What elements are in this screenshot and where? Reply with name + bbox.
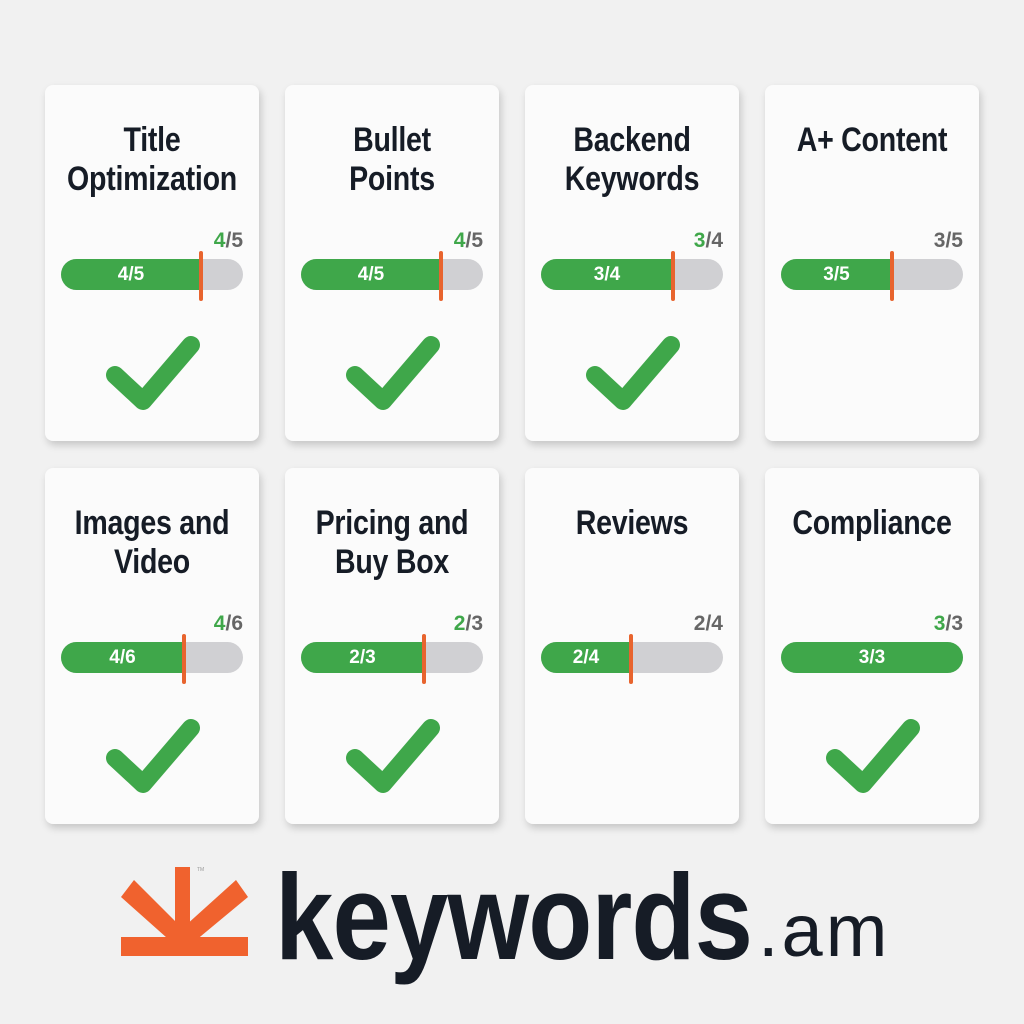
- marker: [439, 251, 443, 301]
- card: Bullet Points: [285, 85, 499, 441]
- score label: 3/3: [934, 612, 963, 635]
- title: A+ Content: [797, 121, 947, 159]
- progress bar: 3/5: [823, 264, 850, 285]
- progress bar: [61, 642, 243, 673]
- title: Compliance: [792, 504, 952, 542]
- card: Images and Video: [45, 468, 259, 824]
- title: [316, 504, 468, 581]
- score label: 4/5: [214, 229, 243, 252]
- title: Backend: [573, 121, 691, 159]
- title: Bullet: [353, 121, 431, 159]
- icon: check: [106, 336, 200, 410]
- score label: 2/4: [694, 612, 723, 635]
- icon: check: [346, 336, 440, 410]
- icon: check: [346, 719, 440, 793]
- progress bar: [301, 259, 483, 290]
- progress bar: 4/5: [118, 264, 144, 285]
- progress bar: [541, 259, 723, 290]
- score label: 4/5: [454, 229, 483, 252]
- title: [67, 121, 237, 198]
- card: Title Optimization: [45, 85, 259, 441]
- logo: [121, 849, 890, 985]
- icon: logo mark: TM: [197, 867, 204, 873]
- card: Pricing and Buy Box: [285, 468, 499, 824]
- marker: [199, 251, 203, 301]
- icon: check: [586, 336, 680, 410]
- progress bar: 2/4: [573, 647, 599, 668]
- title: Optimization: [67, 160, 237, 198]
- progress bar: [781, 259, 963, 290]
- title: Keywords: [565, 160, 699, 198]
- title: [75, 504, 229, 581]
- card: A+ Content: [765, 85, 979, 441]
- progress bar: 3/3: [859, 647, 885, 668]
- title: Video: [114, 543, 190, 581]
- wordmark: keywords: [275, 849, 752, 985]
- marker: [671, 251, 675, 301]
- title: Points: [349, 160, 435, 198]
- progress bar: 4/6: [109, 647, 136, 668]
- icon: logo mark: [121, 867, 248, 956]
- progress bar: [301, 642, 483, 673]
- card: Reviews: [525, 468, 739, 824]
- progress bar: 2/3: [349, 647, 376, 668]
- title: [565, 121, 699, 198]
- score label: 3/4: [694, 229, 723, 252]
- score label: 2/3: [454, 612, 483, 635]
- icon: check: [826, 719, 920, 793]
- progress bar: 3/4: [594, 264, 620, 285]
- title: [349, 121, 435, 198]
- title: Reviews: [576, 504, 688, 542]
- marker: [422, 634, 426, 684]
- progress bar: [781, 642, 963, 673]
- marker: [890, 251, 894, 301]
- marker: [629, 634, 633, 684]
- title: Buy Box: [335, 543, 449, 581]
- marker: [182, 634, 186, 684]
- progress bar: [61, 259, 243, 290]
- icon: check: [106, 719, 200, 793]
- score label: 3/5: [934, 229, 963, 252]
- progress bar: 4/5: [358, 264, 384, 285]
- title: Pricing and: [316, 504, 468, 542]
- score label: 4/6: [214, 612, 243, 635]
- card: Compliance: [765, 468, 979, 824]
- domain suffix: .am: [758, 889, 890, 972]
- title: Images and: [75, 504, 229, 542]
- title: Title: [124, 121, 180, 159]
- card: Backend Keywords: [525, 85, 739, 441]
- progress bar: [541, 642, 723, 673]
